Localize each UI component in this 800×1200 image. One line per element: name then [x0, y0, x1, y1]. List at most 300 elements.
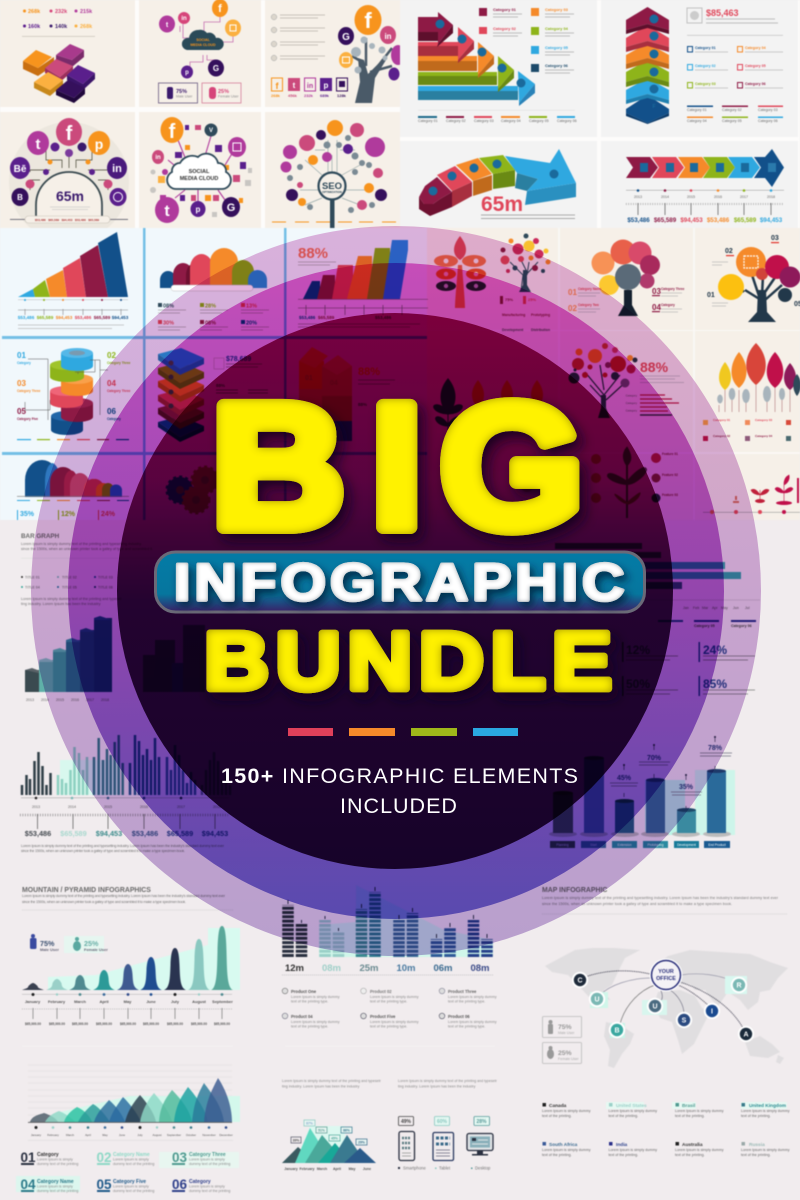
- chart: stacked cylinders: Category Five: [17, 417, 38, 421]
- chart: cylinder bars with percentages: Prototyping: [647, 843, 664, 847]
- chart: big circles tree: 03: [652, 287, 661, 296]
- chart: overlapping mountains: 45%: [331, 1136, 338, 1140]
- chart: descending arches: 12%: [61, 511, 76, 518]
- chart: row of coloured leaf trees: Category 03: [755, 418, 773, 422]
- chart: horizontal gantt bars: 24%: [703, 643, 727, 657]
- panel: light blue grid background: [0, 228, 427, 520]
- panel: 65m social arch: B: [17, 193, 23, 202]
- panel: 65m social arch: f: [66, 123, 73, 145]
- text block: two intro paragraphs: Lorem Ipsum is simply dummy text of the printing and typesetr: [282, 1079, 382, 1083]
- panel: social media cloud with connectors: G: [213, 64, 219, 73]
- panel: chevron timeline: $65,589: [654, 217, 677, 224]
- chart: 88% tree with bars: 88%: [640, 359, 669, 375]
- panel: map infographic: YOUR: [658, 969, 674, 975]
- chart: horizontal gantt bars: Category 06: [731, 624, 752, 628]
- panel: chevron timeline: 2014: [661, 195, 669, 199]
- chart: overlapping mountains: 86%: [343, 1128, 350, 1132]
- panel: bar graph section: 2013: [26, 698, 34, 702]
- legend: category numbers: Category Name: [113, 1152, 150, 1158]
- panel: mountain pyramid infographics: $65,000.00: [25, 1022, 41, 1026]
- panel: mountain pyramid infographics: $65,000.00: [143, 1022, 159, 1026]
- panel: chevron stack with $85,463: Category 02: [722, 108, 742, 112]
- chart: overlapping mountains: 87%: [306, 1122, 313, 1126]
- panel: social media cloud with connectors: Female User: [218, 94, 239, 98]
- legend: products: Product Five: [370, 1014, 396, 1019]
- chart: stacked isometric layers: 88%: [216, 383, 225, 388]
- chart: stacked cubes: 01: [305, 375, 313, 382]
- chart: overlapping peaks area chart: February: [47, 1133, 59, 1137]
- chart: eye tree and infographic tree: Distribution: [531, 328, 550, 332]
- chart: bar chart with timeline values: $53,486: [25, 829, 51, 838]
- chart: arches with percent legend: 08%: [163, 304, 174, 310]
- chart: overlapping mountains: January: [284, 1167, 298, 1171]
- panel: bar graph section: [21, 533, 205, 702]
- chart: stacked isometric layers: $78,689: [226, 356, 251, 363]
- chart: rising wedge bars: $65,589: [94, 315, 111, 320]
- panel: SEO magnifier tree: SEO: [322, 181, 342, 192]
- chart: stacked cylinders: [17, 348, 131, 440]
- legend: products: Lorem Ipsum is simply dummy: [291, 1020, 340, 1024]
- legend: country list: Lorem Ipsum is simply dummy: [675, 1148, 724, 1152]
- legend: category numbers: Category: [189, 1179, 211, 1185]
- chart: stacked cylinders: Category Three: [107, 389, 131, 393]
- panel: social media cloud with icons: SOCIAL: [189, 169, 210, 175]
- legend: country list: Lorem Ipsum is simply dummy: [542, 1109, 591, 1113]
- panel: social media tree with icon row: 456k: [288, 93, 298, 98]
- panel: map infographic: U: [652, 1004, 658, 1010]
- panel: social media cloud with connectors: in: [181, 16, 187, 22]
- chart: overlapping peaks area chart: [28, 1065, 240, 1141]
- panel: 65m social arch: $53,486 $65,589 $94,453 $53,486 $65,589: [35, 218, 99, 222]
- chart: overlapping mountains: [282, 1120, 376, 1171]
- legend: country list: text of the printing.: [675, 1153, 705, 1157]
- panel: map infographic: S: [682, 1018, 687, 1024]
- legend: country list: Lorem Ipsum is simply dummy: [542, 1148, 591, 1152]
- arrow E blue: [418, 71, 535, 106]
- chart: rising wedge bars: [18, 232, 129, 328]
- chart: overlapping mountains: 39%: [293, 1138, 299, 1142]
- chart: 88% tree with bars: Category: [626, 401, 638, 405]
- panel: map infographic: B: [614, 1028, 620, 1034]
- legend: category numbers: Lorem Ipsum is simply: [189, 1158, 225, 1162]
- panel: curved 3D arrow with 65m: [400, 141, 597, 228]
- chart: row of coloured leaf trees: Category 02: [713, 434, 731, 438]
- panel: social media tree with icon row: f: [276, 81, 280, 91]
- chart: overlapping mountains: 51%: [318, 1128, 325, 1132]
- chart: 88% tree with bars: [568, 343, 684, 418]
- text block: two intro paragraphs: ting industry. Lorem Ipsum has been the industry: [398, 1084, 476, 1088]
- chart: eye tree and infographic tree: [434, 234, 550, 332]
- chart: segmented bars with m values: 06m: [433, 963, 453, 974]
- panel: chevron timeline: $65,589: [734, 217, 757, 224]
- chart: segmented bars with m values: 12m: [285, 963, 304, 974]
- chart: cylinder bars with percentages: Start: [590, 843, 597, 847]
- panel: mountain pyramid infographics: April: [99, 999, 109, 1004]
- chart: sprout growth timeline: [703, 475, 800, 514]
- panel: chevron timeline: 2013: [634, 195, 642, 199]
- legend: category numbers: [16, 1150, 239, 1193]
- subtitle: 150+ elements included: 150+ INFOGRAPHIC ELEMENTS: [221, 764, 578, 788]
- chart: 88% 3D bars: $53,486: [375, 315, 392, 320]
- chart: bar chart with timeline values: 2013: [32, 805, 40, 809]
- legend: category numbers: 02: [96, 1150, 112, 1165]
- panel: mountain pyramid infographics: June: [146, 999, 156, 1004]
- chart: 3D stepped bars: [25, 616, 112, 692]
- panel: chevron timeline: 2016: [714, 195, 722, 199]
- chart: overlapping peaks area chart: August: [152, 1133, 162, 1137]
- chart: segmented bars with m values: 25m: [359, 963, 379, 974]
- chart: arches with percent legend: 20%: [246, 320, 257, 326]
- legend: category numbers: 06: [172, 1177, 188, 1192]
- chart: overlapping mountains: May: [349, 1167, 355, 1171]
- chart: eye tree and infographic tree: 75%: [505, 297, 513, 302]
- chart: stacked cylinders: 06: [107, 407, 116, 416]
- panel: social media stats and isometric tiles: 268k: [80, 24, 93, 30]
- legend: country list: [542, 1102, 790, 1157]
- legend: category numbers: Lorem Ipsum is simply: [37, 1184, 73, 1188]
- panel: stacked 3D arrows: Category 01: [418, 119, 438, 123]
- chart: stacked cubes: 88%: [358, 366, 380, 378]
- legend: products: [282, 988, 497, 1047]
- panel: mountain pyramid infographics: $65,000.00: [120, 1022, 136, 1026]
- panel: bar graph section: TITLE 04: [25, 586, 40, 590]
- chart: horizontal gantt bars: Jul: [745, 606, 750, 610]
- panel: chevron stack with $85,463: Category 03: [695, 82, 716, 86]
- chart: big circles tree: Category: [661, 303, 675, 307]
- panel: SEO magnifier tree: [265, 112, 400, 228]
- chart: horizontal gantt bars: Mar: [702, 606, 709, 610]
- chart: overlapping peaks area chart: March: [66, 1133, 74, 1137]
- legend: country list: Canada: [549, 1103, 567, 1109]
- panel: social media tree with icon row: in: [384, 32, 392, 41]
- panel: bar graph section: Lorem Ipsum is simply dummy text of the printing and typesetting industry.: [21, 542, 142, 546]
- legend: products: text of the printing type.: [291, 1000, 328, 1004]
- arrow A maroon: [418, 12, 453, 47]
- legend: products: Product One: [291, 989, 317, 994]
- panel: chevron stack with $85,463: Category 04: [687, 119, 707, 123]
- chart: overlapping mountains: March: [317, 1167, 327, 1171]
- panel: mountain pyramid infographics: February: [48, 999, 66, 1004]
- panel: chevron timeline: $94,453: [680, 217, 703, 224]
- legend: category numbers: 05: [96, 1177, 112, 1192]
- chart: stacked isometric layers: [158, 348, 268, 442]
- chart: horizontal gantt bars: 12%: [626, 643, 650, 657]
- panel: bar graph section: BAR GRAPH: [21, 533, 60, 540]
- panel: mountain pyramid infographics: $65,000.00: [49, 1022, 65, 1026]
- panel: mountain pyramid infographics: Female User: [84, 947, 108, 952]
- panel: 65m social arch: in: [112, 163, 122, 175]
- arcs from your office: [585, 971, 743, 1028]
- panel: bar graph section: TITLE 05: [62, 586, 77, 590]
- panel: bar graph section: 2018: [101, 698, 109, 702]
- panel: map infographic: C: [577, 978, 583, 984]
- chart: row of coloured leaf trees: [703, 343, 800, 441]
- panel: mountain pyramid infographics: $65,000.00: [214, 1022, 230, 1026]
- subtitle: 150+ elements included: INCLUDED: [340, 794, 458, 818]
- panel: mountain pyramid infographics: May: [124, 999, 132, 1004]
- chart: dark inner leaves and labels: Feature 02: [662, 473, 678, 477]
- legend: country list: India: [616, 1142, 628, 1148]
- chart: dark stepped bars: [143, 625, 205, 692]
- text block: two intro paragraphs: ting industry. Lorem Ipsum has been the industry: [282, 1084, 360, 1088]
- chart: big circles tree: 02: [568, 304, 577, 313]
- chart: stacked cubes: 04: [330, 380, 338, 387]
- chart: dark inner leaves and labels: Feature 01: [662, 452, 678, 456]
- panel: chevron stack with $85,463: Category 02: [695, 64, 716, 68]
- legend: products: Lorem Ipsum is simply dummy: [291, 995, 340, 999]
- panel: chevron timeline: $53,486: [627, 217, 650, 224]
- chart: horizontal gantt bars: Feb: [693, 606, 699, 610]
- chart: bar chart with timeline values: since the 1500s, when an unknown printer took a galley of type and scrambled it to make a type specimen book.: [21, 849, 185, 853]
- legend: category numbers: Lorem Ipsum is simply: [37, 1158, 73, 1162]
- chart: cylinder bars with percentages: 78%: [708, 745, 723, 752]
- legend: category numbers: dummy text of the printing: [113, 1189, 154, 1193]
- panel: 65m social arch: 65m: [56, 188, 84, 204]
- panel: chevron stack with $85,463: Category 01: [687, 108, 707, 112]
- panel: social media stats and isometric tiles: [0, 0, 135, 107]
- panel: map infographic: R: [736, 982, 742, 990]
- panel: mountain pyramid infographics: since the 1500s, when an unknown printer took a galley of type and scrambled it to make a type specimen book.: [22, 900, 186, 904]
- chart: business tree with categories: [707, 235, 800, 322]
- panel: bar graph section: TITLE 01: [25, 576, 40, 580]
- chart: big circles tree: Category Three: [661, 287, 685, 291]
- panel: stacked 3D arrows: Category 05: [529, 119, 549, 123]
- legend: country list: Australia: [682, 1142, 703, 1148]
- legend: products: Product Three: [448, 989, 477, 994]
- chart: cylinder bars with percentages: Extension: [618, 843, 632, 847]
- legend: products: Product 06: [448, 1014, 470, 1019]
- panel: social media cloud with icons: f: [169, 121, 176, 143]
- chart: 88% tree with bars: Category: [626, 394, 638, 398]
- legend: category numbers: Lorem Ipsum is simply: [113, 1184, 149, 1188]
- chart: segmented bars with m values: [282, 885, 494, 975]
- chart: eye tree and infographic tree: Development: [502, 328, 524, 332]
- panel: mountain pyramid infographics: $65,000.00: [191, 1022, 207, 1026]
- chart: overlapping mountains: 29%: [358, 1140, 365, 1144]
- panel: stacked 3D arrows: Category 03: [545, 7, 569, 12]
- chart: dark inner leaves and labels: [434, 378, 678, 518]
- outer translucent circle: [31, 226, 761, 956]
- chart: cylinder bars with percentages: 45%: [617, 775, 632, 782]
- legend: country list: Russia: [749, 1142, 765, 1148]
- panel: map infographic: I: [711, 1008, 713, 1016]
- chart: cylinder bars with percentages: End Product: [708, 843, 726, 847]
- panel: chevron timeline: $94,453: [760, 217, 783, 224]
- panel: mountain pyramid infographics: July: [171, 999, 180, 1004]
- legend: category numbers: dummy text of the printing: [189, 1189, 230, 1193]
- chart: rising wedge bars: $65,589: [37, 315, 54, 320]
- chart: horizontal gantt bars: Apr: [712, 606, 718, 610]
- panel: social media cloud with connectors: p: [185, 70, 189, 76]
- panel: social media cloud with icons: in: [155, 155, 161, 161]
- panel: chevron stack with $85,463: Category 01: [695, 46, 716, 50]
- legend: products: Lorem Ipsum is simply dummy: [370, 1020, 419, 1024]
- chart: bar chart with timeline values: [20, 735, 230, 853]
- chart: devices share: Tablet: [439, 1166, 451, 1170]
- chart: row of coloured leaf trees: Category 01: [713, 418, 731, 422]
- panel: social media cloud with connectors: 25%: [218, 89, 229, 95]
- chart: rising wedge bars: $94,453: [56, 315, 73, 320]
- panel: mountain pyramid infographics: March: [74, 999, 86, 1004]
- legend: category numbers: dummy text of the printing: [37, 1162, 78, 1166]
- panel: social media cloud with connectors: Male User: [176, 94, 193, 98]
- legend: category numbers: 04: [20, 1177, 36, 1192]
- panel: social media tree with icon row: p: [324, 81, 329, 90]
- chart: business tree with categories: 02: [725, 248, 733, 255]
- panel: social media cloud with connectors: 75%: [176, 89, 187, 95]
- panel: chevron timeline: $53,486: [707, 217, 730, 224]
- panel: social media tree with icon row: [265, 0, 405, 107]
- chart: rising wedge bars: $53,486: [18, 315, 35, 320]
- panel: 65m social arch: p: [95, 136, 103, 152]
- panel: social media tree with icon row: in: [307, 83, 313, 90]
- panel: SEO magnifier tree: OPTIMIZATION: [322, 190, 342, 194]
- panel: bar graph section: 2016: [71, 698, 79, 702]
- panel: stacked 3D arrows: Category 02: [493, 26, 517, 31]
- panel: 65m social arch: t: [36, 136, 40, 153]
- chart: bar chart with timeline values: 2016: [140, 805, 148, 809]
- panel: social media stats and isometric tiles: 268k: [28, 9, 41, 15]
- text block: two intro paragraphs: Lorem Ipsum is simply dummy text of the printing and typesetr: [398, 1079, 498, 1083]
- panel: chevron timeline: [601, 141, 798, 228]
- chart: overlapping peaks area chart: January: [31, 1133, 42, 1137]
- legend: category numbers: 01: [20, 1150, 36, 1165]
- panel: mountain pyramid infographics: [22, 887, 240, 1047]
- chart: business tree with categories: 01: [707, 292, 715, 299]
- inner dark circle: [117, 313, 673, 869]
- panel: chevron stack with $85,463: [601, 0, 798, 137]
- legend: country list: text of the printing.: [741, 1153, 771, 1157]
- panel: chevron stack with $85,463: $85,463: [706, 8, 739, 18]
- legend: category numbers: dummy text of the printing: [113, 1162, 154, 1166]
- chart: stacked cylinders: 04: [107, 379, 116, 388]
- chart: stacked cylinders: 03: [17, 379, 26, 388]
- panel: social media tree with icon row: 128k: [337, 93, 347, 98]
- panel: stacked 3D arrows: Category 04: [501, 119, 521, 123]
- legend: country list: text of the printing.: [675, 1114, 705, 1118]
- chart: bar chart with timeline values: $94,453: [96, 829, 122, 838]
- panel: social media cloud with connectors: [139, 0, 261, 107]
- legend: country list: United States: [616, 1103, 647, 1109]
- chart: overlapping peaks area chart: April: [85, 1133, 91, 1137]
- panel: chevron timeline: 2017: [740, 195, 748, 199]
- panel: bar graph section: 2017: [86, 698, 94, 702]
- legend: country list: text of the printing.: [608, 1114, 638, 1118]
- panel: mountain pyramid infographics: Lorem Ipsum is simply dummy text of the printing and typesetting industry. Lorem Ipsum has been the industry's standard dummy text ever: [22, 894, 226, 898]
- legend: country list: Lorem Ipsum is simply dummy: [741, 1148, 790, 1152]
- chart: 88% 3D bars: $53,486: [299, 315, 316, 320]
- chart: overlapping peaks area chart: June: [119, 1133, 126, 1137]
- panel: map infographic: MAP INFOGRAPHIC: [542, 887, 607, 894]
- panel: mountain pyramid infographics: January: [25, 999, 41, 1004]
- legend: country list: text of the printing.: [542, 1114, 572, 1118]
- chart: segmented bars with m values: 10m: [396, 963, 416, 974]
- arrow C orange: [418, 42, 494, 78]
- panel: social media tree with icon row: 232k: [304, 93, 314, 98]
- chart: devices share: 28%: [476, 1119, 487, 1125]
- chart: 88% tree with bars: Category: [626, 408, 638, 412]
- legend: category numbers: Lorem Ipsum is simply: [113, 1158, 149, 1162]
- chart: bar chart with timeline values: $94,453: [202, 829, 228, 838]
- chart: bar chart with timeline values: 2014: [68, 805, 76, 809]
- panel: bar graph section: TITLE 02: [62, 576, 77, 580]
- panel: bar graph section: ting industry. Lorem Ipsum has been the industry: [21, 602, 101, 606]
- panel: mountain pyramid infographics: $65,000.00: [96, 1022, 112, 1026]
- chart: horizontal gantt bars: [555, 543, 760, 696]
- chart: stacked cylinders: Category: [17, 361, 31, 365]
- panel: stacked 3D arrows: Category 05: [545, 45, 569, 50]
- chart: big circles tree: 01: [568, 288, 577, 297]
- panel: stacked 3D arrows: Category 06: [545, 63, 569, 68]
- chart: arches with percent legend: 30%: [163, 320, 174, 326]
- panel: chevron stack with $85,463: Category 03: [758, 108, 778, 112]
- chart: stacked cubes: [299, 347, 395, 441]
- panel: social media tree with icon row: 689k: [320, 93, 330, 98]
- legend: category numbers: dummy text of the printing: [37, 1189, 78, 1193]
- panel: social media stats and isometric tiles: 232k: [55, 9, 68, 15]
- chart: eye tree and infographic tree: Prototyping: [531, 313, 550, 317]
- text block: two intro paragraphs: [282, 1079, 498, 1088]
- chart: overlapping peaks area chart: May: [102, 1133, 108, 1137]
- chart: cylinder bars with percentages: 70%: [647, 755, 662, 762]
- legend: country list: Lorem Ipsum is simply dummy: [608, 1109, 657, 1113]
- panel: 65m social arch: [0, 112, 135, 242]
- panel: mountain pyramid infographics: September: [212, 999, 233, 1004]
- panel: social media cloud with connectors: f: [218, 3, 222, 15]
- panel: social media cloud with connectors: MEDIA CLOUD: [190, 43, 216, 47]
- panel: mountain pyramid infographics: Male User: [40, 947, 59, 952]
- panel: map infographic: Female User: [558, 1057, 579, 1061]
- chart: horizontal gantt bars: 50%: [626, 677, 650, 691]
- legend: category numbers: Category Five: [113, 1179, 146, 1185]
- panel: social media cloud with connectors: t: [166, 22, 169, 29]
- chart: devices share: 49%: [401, 1119, 412, 1125]
- panel: map infographic: Male User: [558, 1031, 575, 1035]
- chart: stacked cylinders: 05: [17, 407, 26, 416]
- legend: products: Product 04: [291, 1014, 313, 1019]
- arrow B red: [418, 27, 474, 63]
- chart: bar chart with timeline values: 2017: [177, 805, 185, 809]
- chart: overlapping mountains: February: [300, 1167, 315, 1171]
- panel: chevron stack with $85,463: F: [652, 104, 656, 110]
- chart: 88% 3D bars: $65,589: [318, 315, 335, 320]
- panel: map infographic: A: [743, 1032, 749, 1038]
- legend: products: Lorem Ipsum is simply dummy: [448, 995, 497, 999]
- legend: country list: Lorem Ipsum is simply dummy: [741, 1109, 790, 1113]
- arrow D green: [418, 56, 514, 92]
- panel: mountain pyramid infographics: 75%: [40, 939, 55, 948]
- panel: chevron stack with $85,463: Category 04: [745, 46, 766, 50]
- chart: 88% 3D bars: [298, 240, 428, 327]
- legend: category numbers: dummy text of the printing: [189, 1162, 230, 1166]
- chart: big circles tree: [568, 240, 685, 316]
- legend: category numbers: Category: [37, 1152, 59, 1158]
- chart: cylinder bars with percentages: 35%: [679, 784, 694, 791]
- panel: bar graph section: TITLE 03: [98, 576, 113, 580]
- legend: products: text of the printing type.: [291, 1024, 328, 1028]
- chart: horizontal gantt bars: Jun: [733, 606, 739, 610]
- chart: bar chart with timeline values: Lorem Ipsum is simply dummy text of the printing and typesetting industry. Lorem Ipsum has been the industry's standard dummy text ever: [21, 844, 225, 848]
- legend: category numbers: Lorem Ipsum is simply: [189, 1184, 225, 1188]
- middle translucent circle: [68, 263, 724, 919]
- chart: rising wedge bars: $94,453: [112, 315, 129, 320]
- panel: map infographic: [542, 887, 788, 1068]
- chart: overlapping peaks area chart: October: [186, 1133, 196, 1137]
- white gutter behind the top panels: [0, 0, 800, 228]
- chart: eye tree and infographic tree: 25%: [528, 297, 536, 302]
- chart: cylinder bars with percentages: [549, 736, 735, 848]
- chart: 88% 3D bars: 88%: [298, 245, 328, 262]
